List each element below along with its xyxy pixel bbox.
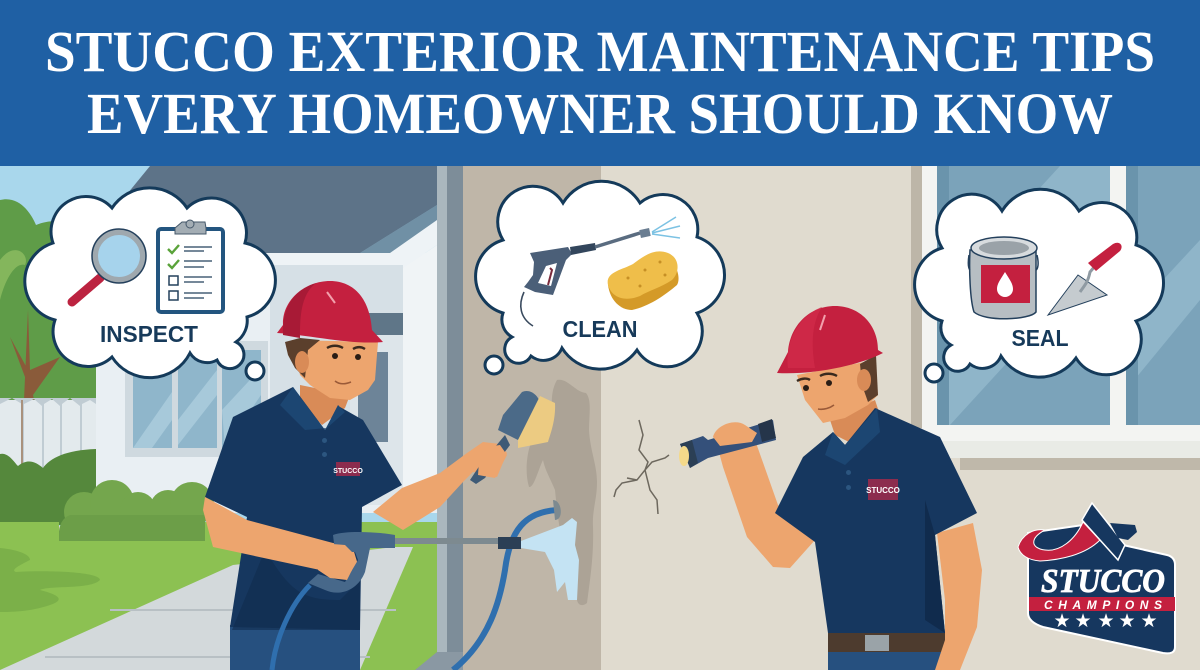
water spray: [521, 518, 579, 600]
icon: clipboard checklist: [158, 220, 223, 312]
rating stars: ★: [1097, 611, 1115, 632]
shirt logo: STUCCO: [333, 468, 363, 475]
logo: Stucco Champions badge: [1018, 503, 1175, 653]
icon: sponge: [608, 251, 679, 310]
worker 2 polo shirt: [775, 408, 977, 633]
shirt logo: [866, 479, 900, 500]
flashlight: [679, 419, 776, 468]
icon: trowel: [1048, 243, 1122, 315]
worker 2 fingers: [713, 422, 757, 446]
rating stars: ★: [1140, 611, 1158, 632]
title banner: EVERY HOMEOWNER SHOULD KNOW: [87, 81, 1113, 146]
worker 2 head: [797, 355, 880, 445]
logo: Stucco Champions badge: STUCCO: [1041, 563, 1165, 600]
thought bubble: clean: [476, 181, 725, 374]
thought bubble: inspect: [25, 188, 275, 380]
worker 1 pants: [230, 625, 360, 670]
shirt logo: [333, 462, 363, 476]
label: seal: SEAL: [1012, 325, 1068, 351]
worker 1 hand on brush: [478, 445, 507, 478]
red hard hat: [277, 281, 383, 343]
worker 1 hand on gun: [318, 543, 353, 580]
red hard hat: [777, 306, 883, 373]
worker 2 near arm: [717, 440, 815, 568]
worker 1 right arm: [373, 442, 507, 530]
background: large window on stucco wall: [911, 166, 1200, 470]
background: house and yard scene: [0, 166, 1200, 670]
wall crack: [614, 420, 669, 514]
rating stars: ★: [1074, 611, 1092, 632]
shirt logo: STUCCO: [866, 486, 900, 495]
label: inspect: INSPECT: [100, 321, 198, 347]
title banner: STUCCO EXTERIOR MAINTENANCE TIPS: [45, 19, 1155, 84]
icon: pressure washer gun: [521, 217, 680, 326]
rating stars: ★: [1118, 611, 1136, 632]
worker 1 polo shirt: [205, 387, 402, 630]
worker 2 pants and belt: [828, 633, 945, 670]
logo: Stucco Champions badge: CHAMPIONS: [1044, 598, 1162, 612]
worker 2 far arm: [935, 523, 982, 670]
icon: magnifying glass: [72, 229, 146, 302]
rating stars: [1053, 611, 1158, 632]
pressure washer hose and gun: [272, 500, 561, 670]
scrub brush: [470, 391, 555, 484]
worker 1 forearm: [203, 497, 358, 578]
worker 1 neck and head: [285, 338, 378, 425]
thought bubble: seal: [915, 189, 1164, 382]
worker cleaning the wall: [203, 281, 579, 670]
rating stars: ★: [1053, 611, 1071, 632]
title banner: [0, 0, 1200, 166]
worker with flashlight: [679, 306, 982, 670]
label: clean: CLEAN: [562, 316, 638, 342]
wall stain: [527, 380, 597, 605]
icon: sealant can: [968, 237, 1038, 319]
